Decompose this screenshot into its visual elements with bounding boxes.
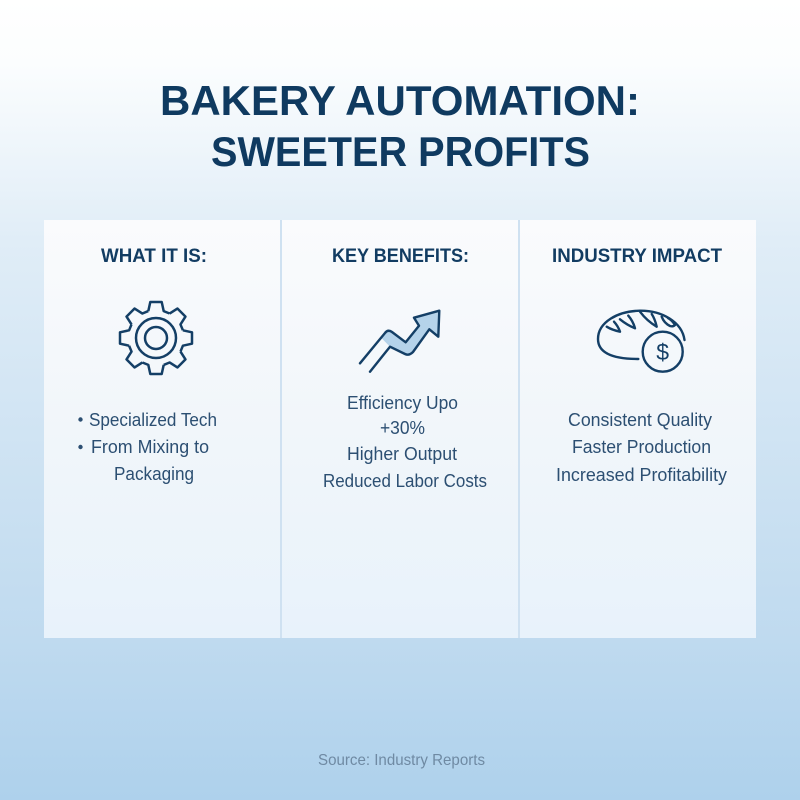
icon: gear [120,302,192,374]
heading: what it is: WHAT IT IS: [101,246,207,267]
text: industry impact list: Consistent Quality [568,410,712,430]
text: industry impact list [556,410,727,485]
title: BAKERY AUTOMATION: [160,77,640,124]
title [160,77,640,175]
text: what it is list: Specialized Tech [89,410,217,430]
text: key benefits list: +30% [380,418,425,438]
text: key benefits list [323,393,487,491]
text: industry impact list: Increased Profitability [556,465,727,485]
source note: Source: Industry Reports [318,752,485,769]
icon: bread with coin [598,311,684,372]
panel: what it is [44,220,280,638]
text: what it is list: From Mixing to [91,437,209,457]
text: what it is list [78,410,217,484]
text: what it is list: Packaging [114,464,194,484]
icon: rising arrow [360,311,439,372]
heading: industry impact: INDUSTRY IMPACT [552,246,722,267]
heading: key benefits: KEY BENEFITS: [332,246,469,267]
panel: key benefits [282,220,518,638]
text: key benefits list: Higher Output [347,444,457,464]
text: key benefits list: Reduced Labor Costs [323,471,487,491]
icon: bread with coin: $ [656,339,669,365]
text: key benefits list: Efficiency Upo [347,393,458,413]
panel: industry impact [520,220,756,638]
title: SWEETER PROFITS [211,128,590,175]
text: industry impact list: Faster Production [572,437,711,457]
